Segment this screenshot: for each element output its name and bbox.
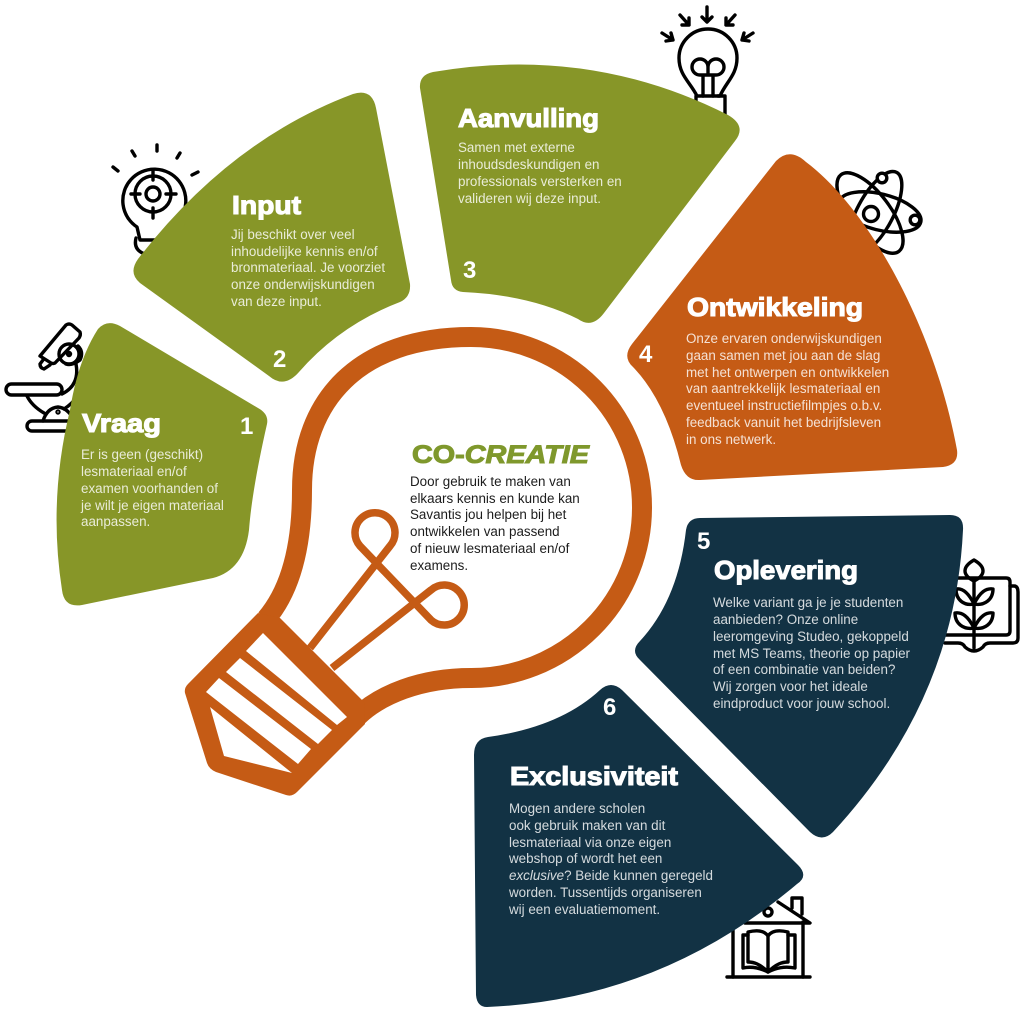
number 1: 1: [240, 413, 253, 440]
text: Vraag description: je wilt je eigen materiaal: [80, 498, 224, 513]
text: co-creatie description: Savantis jou helpen bij het: [410, 507, 567, 522]
text: Oplevering description: met MS Teams, theorie op papier: [713, 646, 911, 661]
text: Exclusiviteit description: lesmateriaal via onze eigen: [509, 835, 671, 850]
text: Exclusiviteit description: Mogen andere scholen: [509, 801, 645, 816]
text: Exclusiviteit description: webshop of wordt het een: [508, 851, 662, 866]
text: Exclusiviteit description: wij een evaluatiemoment.: [508, 902, 660, 917]
text: co-creatie description: ontwikkelen van passend: [410, 524, 560, 539]
bulb glass ring: [266, 337, 642, 716]
text: Vraag description: Er is geen (geschikt): [81, 447, 203, 462]
panel: 5 Oplevering: [635, 515, 963, 838]
text: Oplevering description: aanbieden? Onze online: [713, 612, 858, 627]
heading: CO-CREATIE: CO- CREATIE: [412, 441, 591, 469]
icon: house with book: [727, 898, 810, 977]
text: Exclusiviteit description: [508, 801, 713, 917]
panel 3 shape: [420, 64, 740, 323]
number 3: 3: [463, 257, 476, 284]
panel 1 shape: [57, 323, 267, 605]
text: Ontwikkeling description: gaan samen met jou aan de slag: [686, 348, 880, 363]
icon: microscope: [6, 324, 84, 431]
icon: atom: [825, 163, 925, 263]
text: Exclusiviteit description: ook gebruik maken van dit: [509, 818, 666, 833]
text: Aanvulling description: valideren wij deze input.: [458, 191, 601, 206]
heading: Exclusiviteit: Exclusiviteit: [510, 761, 678, 791]
panel: 2 Input: [133, 93, 410, 382]
center text: co-creatie: [410, 441, 591, 573]
icon: bulb with arrows: [662, 7, 753, 115]
heading: Input: Input: [232, 190, 301, 220]
text: Input description: inhoudelijke kennis en/of: [231, 244, 378, 259]
icon: bulb with target: [113, 145, 198, 254]
panel: 6 Exclusiviteit: [474, 685, 803, 1007]
text: Oplevering description: [713, 595, 911, 711]
text: Ontwikkeling description: met het ontwerpen en ontwikkelen: [686, 365, 889, 380]
panel: 4 Ontwikkeling: [627, 154, 957, 480]
text: Aanvulling description: inhoudsdeskundigen en: [458, 157, 599, 172]
panel 6 shape: [474, 685, 803, 1007]
text: Ontwikkeling description: van aantrekkelijk lesmateriaal en: [686, 381, 880, 396]
panel: 1 Vraag: [57, 323, 267, 605]
text: Vraag description: lesmateriaal en/of: [81, 464, 187, 479]
icon: plant on book: [945, 560, 1018, 651]
bulb filament: [310, 513, 464, 668]
panel 2 shape: [133, 93, 410, 382]
text: Ontwikkeling description: eventueel instructiefilmpjes o.b.v.: [686, 398, 882, 413]
text: co-creatie description: Door gebruik te maken van: [410, 474, 571, 489]
text: Exclusiviteit description: exclusive? Beide kunnen geregeld: [509, 868, 713, 883]
heading: Ontwikkeling: Ontwikkeling: [687, 292, 863, 322]
text: co-creatie description: of nieuw lesmateriaal en/of: [410, 541, 570, 556]
panel: 3 Aanvulling: [420, 64, 740, 323]
text: Vraag description: [80, 447, 224, 529]
text: Vraag description: aanpassen.: [81, 514, 150, 529]
text: Oplevering description: of een combinatie van beiden?: [713, 662, 895, 677]
text: co-creatie description: examens.: [410, 558, 468, 573]
number 5: 5: [697, 528, 710, 555]
central lightbulb outline: [185, 337, 642, 796]
text: Aanvulling description: [458, 140, 622, 206]
text: Input description: [231, 227, 385, 309]
text: Input description: onze onderwijskundigen: [231, 277, 375, 292]
bulb socket: [185, 613, 365, 796]
heading: Vraag: Vraag: [82, 408, 161, 438]
text: Input description: bronmateriaal. Je voorziet: [231, 260, 385, 275]
text: Aanvulling description: professionals versterken en: [458, 174, 622, 189]
panel 5 shape: [635, 515, 963, 838]
number 2: 2: [273, 346, 286, 373]
text: Input description: Jij beschikt over veel: [231, 227, 355, 242]
text: co-creatie description: [410, 474, 580, 573]
text: Oplevering description: Welke variant ga je je studenten: [713, 595, 903, 610]
text: Ontwikkeling description: [686, 331, 889, 447]
number 6: 6: [603, 694, 616, 721]
text: Ontwikkeling description: feedback vanuit het bedrijfsleven: [686, 415, 881, 430]
text: Ontwikkeling description: Onze ervaren onderwijskundigen: [686, 331, 882, 346]
panel 4 shape: [627, 154, 957, 480]
number 4: 4: [639, 341, 653, 368]
text: Oplevering description: eindproduct voor jouw school.: [713, 696, 890, 711]
text: Ontwikkeling description: in ons netwerk.: [686, 432, 776, 447]
text: Exclusiviteit description: worden. Tussentijds organiseren: [508, 885, 702, 900]
text: Oplevering description: Wij zorgen voor het ideale: [713, 679, 868, 694]
text: Aanvulling description: Samen met externe: [458, 140, 575, 155]
text: Input description: van deze input.: [231, 294, 322, 309]
heading: Oplevering: Oplevering: [714, 555, 858, 585]
heading: Aanvulling: Aanvulling: [458, 103, 599, 133]
text: Oplevering description: leeromgeving Studeo, gekoppeld: [713, 629, 909, 644]
text: co-creatie description: elkaars kennis en kunde kan: [410, 491, 580, 506]
text: Vraag description: examen voorhanden of: [81, 481, 218, 496]
